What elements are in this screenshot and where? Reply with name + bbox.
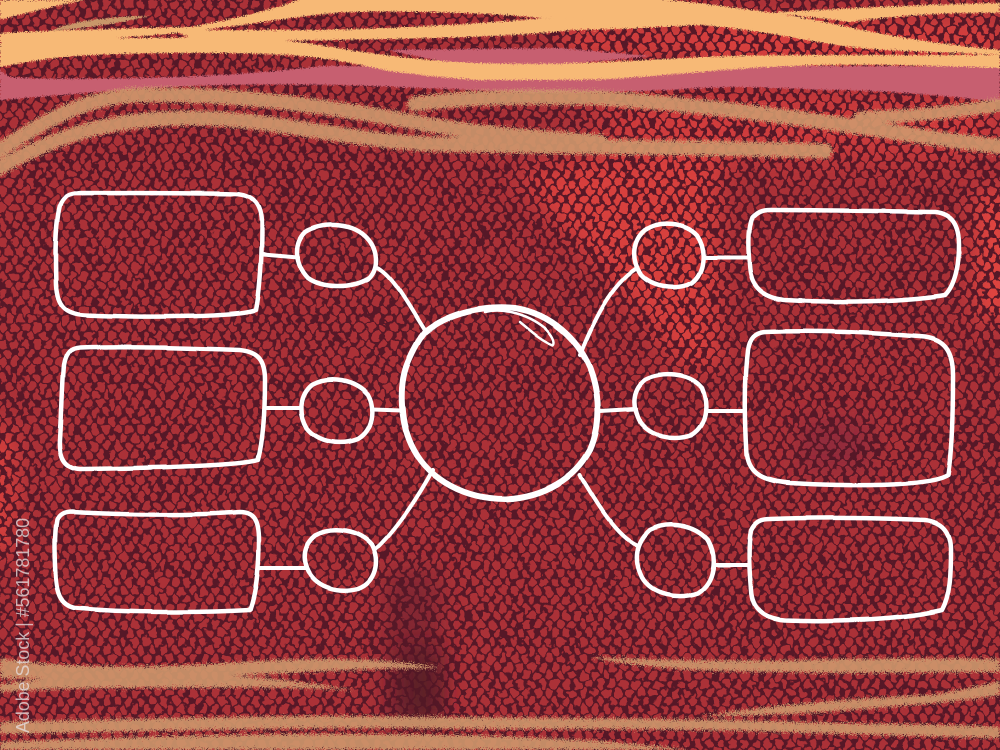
top orange bands — [0, 0, 1000, 80]
left box 1 — [55, 193, 262, 317]
right box 1 — [748, 210, 959, 302]
left circle 3 — [304, 530, 376, 591]
right box 2 — [745, 331, 953, 485]
mind map diagram — [55, 193, 959, 621]
left circle 1 — [297, 225, 376, 286]
connectors — [259, 254, 749, 568]
left box 2 — [60, 347, 265, 469]
left circle 2 — [301, 380, 372, 442]
left box 3 — [55, 512, 259, 612]
top pink bands — [0, 48, 1000, 102]
right circle 2 — [634, 375, 706, 438]
shadow: vertical dark fold — [405, 655, 437, 720]
watermark text: Adobe Stock | #561781780 — [13, 518, 33, 733]
top sandy bands — [0, 95, 1000, 170]
right box 3 — [749, 518, 951, 621]
central circle — [402, 307, 598, 499]
right circle 3 — [637, 525, 714, 596]
bottom sandy bands — [0, 657, 1000, 750]
right circle 1 — [634, 224, 704, 287]
